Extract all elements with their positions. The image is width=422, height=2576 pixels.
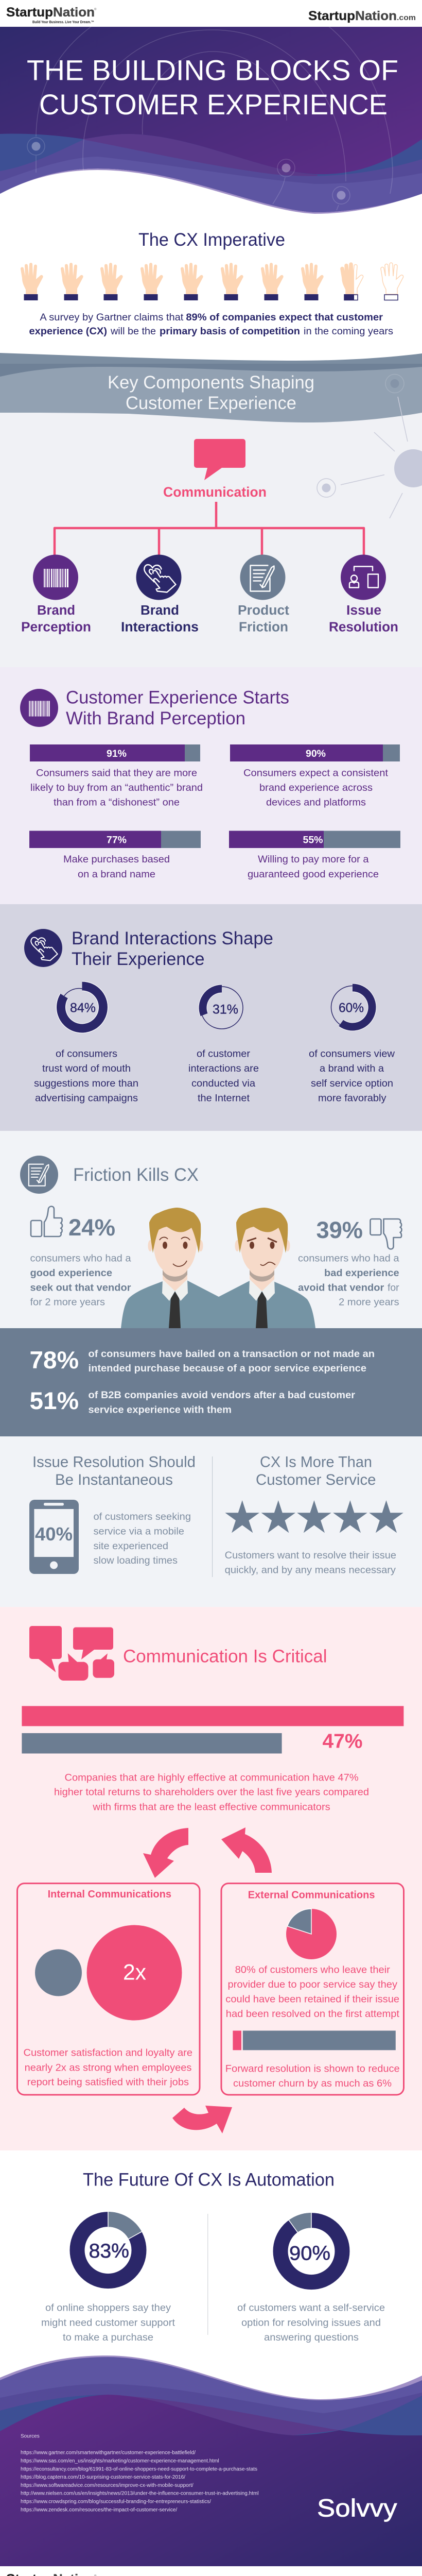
text: 31% caption: interactions are	[188, 1063, 259, 1074]
person: smiling	[148, 1208, 203, 1328]
text: 60% caption: more favorably	[318, 1092, 386, 1104]
heading: Issue Resolution	[32, 1454, 196, 1488]
stat: 90%	[230, 744, 400, 808]
card: Internal Communications: Internal Communications	[48, 1889, 171, 1900]
card: External Communications: had been resolved on the first attempt	[226, 2008, 400, 2020]
text: sources	[21, 2434, 259, 2513]
stat: 77%: 77%	[107, 835, 127, 846]
title: THE BUILDING BLOCKS OF	[27, 55, 398, 87]
panel: communication	[0, 1607, 422, 2150]
text: bad experience: avoid that vendor	[298, 1282, 384, 1294]
text: Gartner survey: 89% of companies expect that customer	[186, 312, 383, 323]
icon: touch badge	[24, 929, 62, 967]
text: Gartner survey: will be the	[110, 326, 156, 337]
bar chart: 47%	[22, 1706, 403, 1754]
pictogram: ten hands, 89% filled	[21, 263, 403, 300]
stat: 55%	[229, 831, 400, 880]
icon: barcode badge	[20, 689, 58, 727]
stat: 91%: Consumers said that they are more	[36, 768, 197, 779]
text: 83% caption: to make a purchase	[63, 2332, 153, 2343]
text: 60% caption: of consumers view	[309, 1048, 395, 1060]
text: sources: https://www.zendesk.com/resources/the-impact-of-customer-service/	[21, 2507, 178, 2513]
footer banner with waves	[0, 2355, 422, 2566]
card: External Communications	[221, 1884, 403, 2095]
donut: 83%: 83%	[89, 2240, 129, 2262]
heading: brand perception: With Brand Perception	[66, 708, 245, 728]
text: sources: https://econsultancy.com/blog/61991-83-of-online-shoppers-need-support-to-complete-a-purchase-stats	[21, 2466, 257, 2472]
text: good experience: consumers who had a	[30, 1253, 131, 1264]
text: 83% caption	[41, 2302, 175, 2343]
text: mobile stat: service via a mobile	[94, 1526, 184, 1537]
heading: Friction Kills CX: Friction Kills CX	[73, 1165, 199, 1185]
text: Gartner survey: primary basis of competition	[160, 326, 300, 337]
heading: brand perception: Customer Experience Starts	[66, 687, 289, 708]
stat: 78%: intended purchase because of a poor service experience	[89, 1363, 366, 1374]
text: Gartner survey: A survey by Gartner claims that	[40, 312, 184, 323]
chart: pie 80%	[286, 1909, 337, 1959]
donut: 60%: 60%	[339, 1001, 364, 1015]
stat: 90%: 90%	[306, 748, 326, 759]
text: 90% caption: option for resolving issues and	[241, 2317, 381, 2328]
heading: Issue Resolution: Issue Resolution Should	[32, 1454, 196, 1470]
text: mobile stat: slow loading times	[94, 1555, 178, 1566]
text: 84% caption: trust word of mouth	[42, 1063, 131, 1074]
label: Communication: Communication	[163, 484, 267, 500]
logo: StartupNation header left: ®	[94, 8, 97, 11]
heading: Key Components Shaping Customer Experience: Key Components Shaping	[108, 372, 314, 393]
stat: 91%: likely to buy from an “authentic” brand	[30, 782, 203, 793]
panel: brand perception	[0, 667, 422, 904]
stat: 24%: 24%	[68, 1214, 115, 1241]
bar chart: 47%: 47%	[322, 1730, 362, 1752]
panel: brand interactions	[0, 904, 422, 1131]
stat: 55%: Willing to pay more for a	[258, 854, 368, 865]
text: resolve quickly	[225, 1550, 396, 1576]
panel: key components background	[0, 353, 422, 668]
donut: 31%: 31%	[213, 1002, 238, 1016]
card: External Communications: provider due to poor service say they	[227, 1979, 397, 1990]
text: bad experience: consumers who had a	[298, 1253, 399, 1264]
text: good experience: seek out that vendor	[30, 1282, 131, 1294]
illustration: two businessmen	[121, 1208, 315, 1328]
component: Brand Perception	[21, 554, 91, 635]
text: 90% caption: of customers want a self-service	[237, 2302, 385, 2314]
stat: 51%	[30, 1387, 356, 1416]
text: bad experience: 2 more years	[339, 1297, 399, 1308]
text: resolve quickly: quickly, and by any means necessary	[225, 1565, 396, 1576]
stat: 39%: 39%	[316, 1217, 363, 1243]
text: sources: https://www.sas.com/en_us/insights/marketing/customer-experience-management.html	[21, 2458, 219, 2464]
logo: Solvvy: Solvvy	[317, 2495, 397, 2522]
component: Brand Interactions	[121, 554, 199, 635]
text: sources: https://blog.capterra.com/10-surprising-customer-service-stats-for-2016/	[21, 2475, 185, 2480]
text: communication returns: with firms that are the least effective communicators	[92, 1801, 330, 1812]
text: 31% caption	[188, 1048, 259, 1104]
stat: 55%: guaranteed good experience	[248, 869, 379, 880]
panel: issue resolution and CX	[0, 1436, 422, 1607]
stat: 91%	[30, 744, 203, 808]
heading: The CX Imperative: The CX Imperative	[138, 230, 285, 250]
stat: 77%: on a brand name	[78, 869, 155, 880]
stat: 91%: 91%	[107, 748, 127, 759]
text: Gartner survey: experience (CX)	[29, 326, 107, 337]
card: External Communications: Forward resolution is shown to reduce	[225, 2063, 400, 2075]
stat: 78%: 78%	[30, 1346, 79, 1374]
donut: 84%: 84%	[70, 1001, 96, 1015]
logo: StartupNation.com header right: .com	[397, 13, 416, 22]
chart: two circles	[35, 1925, 182, 2021]
text: 60% caption	[309, 1048, 395, 1104]
heading: Key Components Shaping Customer Experience	[108, 372, 314, 413]
text: sources: https://www.crowdspring.com/blog/successful-branding-for-entrepreneurs-statistics/	[21, 2499, 211, 2505]
text: bad experience: for	[388, 1282, 399, 1294]
icon: speech bubbles	[29, 1626, 114, 1681]
text: good experience: for 2 more years	[30, 1297, 105, 1308]
heading: Key Components Shaping Customer Experience: Customer Experience	[126, 393, 296, 413]
component: Brand Interactions: Interactions	[121, 619, 199, 635]
heading: Communication Is Critical: Communication Is Critical	[123, 1647, 327, 1666]
heading: Issue Resolution: Be Instantaneous	[55, 1471, 173, 1488]
stat: 90%: brand experience across	[259, 782, 373, 793]
text: 31% caption: the Internet	[198, 1092, 250, 1104]
card: Internal Communications: Customer satisfaction and loyalty are	[24, 2047, 192, 2059]
text: sources: http://www.nielsen.com/us/en/insights/news/2013/under-the-influence-consumer-trust-in-advertising.html	[21, 2491, 259, 2497]
tree connector	[55, 502, 364, 556]
component: Brand Perception: Perception	[21, 619, 91, 635]
text: communication returns: Companies that are highly effective at communication have 47%	[65, 1772, 359, 1784]
card: Internal Communications: nearly 2x as strong when employees	[25, 2062, 192, 2073]
header banner with waves	[0, 27, 422, 214]
text: Gartner survey: in the coming years	[304, 326, 393, 337]
heading: CX is more	[256, 1454, 376, 1488]
stat: 55%: 55%	[303, 835, 323, 846]
card: External Communications: External Communications	[248, 1890, 375, 1901]
stat: 77%	[29, 831, 201, 880]
text: communication returns: higher total returns to shareholders over the last five years compared	[54, 1787, 369, 1798]
stat: 78%: of consumers have bailed on a transaction or not made an	[89, 1349, 375, 1360]
divider	[207, 2214, 208, 2335]
text: bad experience	[298, 1253, 399, 1308]
text: 83% caption: might need customer support	[41, 2317, 175, 2328]
text: 84% caption: of consumers	[56, 1048, 117, 1060]
text: mobile stat	[94, 1511, 191, 1566]
heading: brand perception	[66, 687, 289, 728]
divider	[212, 1456, 213, 1577]
arrow: left	[143, 1828, 188, 1878]
text: mobile stat: site experienced	[94, 1540, 168, 1552]
text: sources: https://www.softwareadvice.com/resources/improve-cx-with-mobile-support/	[21, 2483, 194, 2488]
icon: phone with 40%	[29, 1500, 79, 1574]
stat: 51%: service experience with them	[89, 1405, 232, 1416]
heading: The Future Of CX Is Automation: The Future Of CX Is Automation	[83, 2170, 335, 2190]
card: External Communications: 80% of customers who leave their	[235, 1964, 390, 1976]
card: External Communications: customer churn by as much as 6%	[233, 2078, 392, 2089]
icon: document badge	[20, 1156, 58, 1194]
logo: StartupNation header left: StartupNation	[6, 5, 95, 20]
component: Product Friction	[238, 554, 289, 635]
chart: two circles: 2x	[123, 1960, 146, 1985]
text: 83% caption: of online shoppers say they	[45, 2302, 171, 2314]
logo: StartupNation header left: Build Your Business. Live Your Dream.™	[32, 21, 94, 24]
donut: 84%	[61, 986, 103, 1028]
panel: friction	[0, 1131, 422, 1328]
component: Brand Perception: Brand	[37, 602, 75, 618]
stat: 91%: than from a “dishonest” one	[54, 797, 180, 808]
component: Issue Resolution: Issue	[346, 602, 381, 618]
arrow: right	[221, 1827, 272, 1873]
icon: thumbs down	[371, 1219, 401, 1249]
heading: brand interactions: Their Experience	[72, 949, 205, 969]
donut: 90%	[280, 2213, 342, 2282]
text: 31% caption: of customer	[197, 1048, 250, 1060]
component: Product Friction: Product	[238, 602, 289, 618]
stat: 78%	[30, 1346, 375, 1374]
text: 31% caption: conducted via	[191, 1078, 255, 1089]
stat: 51%: 51%	[30, 1387, 79, 1414]
donut: 83%	[77, 2212, 142, 2281]
person: frowning	[235, 1208, 290, 1328]
icon: phone with 40%: 40%	[35, 1523, 73, 1545]
chart: 6% bar	[233, 2031, 396, 2050]
component: Issue Resolution	[329, 554, 398, 635]
text: sources: https://www.gartner.com/smarterwithgartner/customer-experience-battlefield/	[21, 2450, 196, 2455]
icon: five stars	[225, 1500, 403, 1533]
text: bad experience: bad experience	[324, 1267, 399, 1279]
component: Brand Interactions: Brand	[140, 602, 179, 618]
text: good experience: good experience	[30, 1267, 112, 1279]
icon: thumbs up	[31, 1207, 62, 1236]
donut: 60%	[331, 986, 374, 1028]
title	[27, 55, 398, 121]
icon: speech bubble	[194, 439, 245, 480]
text: 84% caption: advertising campaigns	[35, 1092, 138, 1104]
heading: brand interactions	[72, 928, 273, 969]
text: good experience	[30, 1253, 131, 1308]
component: Issue Resolution: Resolution	[329, 619, 398, 635]
text: resolve quickly: Customers want to resolve their issue	[225, 1550, 396, 1561]
heading: CX is more: CX Is More Than	[260, 1454, 372, 1470]
arrow: bottom	[172, 2106, 232, 2133]
text: 60% caption: self service option	[311, 1078, 393, 1089]
title: CUSTOMER EXPERIENCE	[39, 89, 388, 121]
card: Internal Communications: report being satisfied with their jobs	[27, 2077, 189, 2088]
heading: brand interactions: Brand Interactions Shape	[72, 928, 273, 948]
stat: 77%: Make purchases based	[63, 854, 170, 865]
component: Product Friction: Friction	[239, 619, 288, 635]
logo: StartupNation.com header right: StartupNation	[308, 9, 397, 23]
text: mobile stat: of customers seeking	[94, 1511, 191, 1522]
stat: 51%: of B2B companies avoid vendors after a bad customer	[89, 1390, 356, 1401]
text: 84% caption	[34, 1048, 138, 1104]
text: 90% caption: answering questions	[264, 2332, 359, 2343]
text: 60% caption: a brand with a	[320, 1063, 384, 1074]
donut: 31%	[201, 987, 243, 1029]
stat: 90%: devices and platforms	[266, 797, 366, 808]
card: Internal Communications	[17, 1884, 200, 2095]
text: communication returns	[54, 1772, 369, 1812]
text: 90% caption	[237, 2302, 385, 2343]
text: 84% caption: suggestions more than	[34, 1078, 138, 1089]
text: Gartner survey	[29, 312, 393, 337]
text: sources: Sources	[21, 2434, 40, 2439]
heading: CX is more: Customer Service	[256, 1471, 376, 1488]
panel: dark stats	[0, 1328, 422, 1436]
stat: 90%: Consumers expect a consistent	[243, 768, 389, 779]
card: External Communications: could have been retained if their issue	[225, 1993, 399, 2005]
donut: 90%: 90%	[289, 2242, 330, 2264]
